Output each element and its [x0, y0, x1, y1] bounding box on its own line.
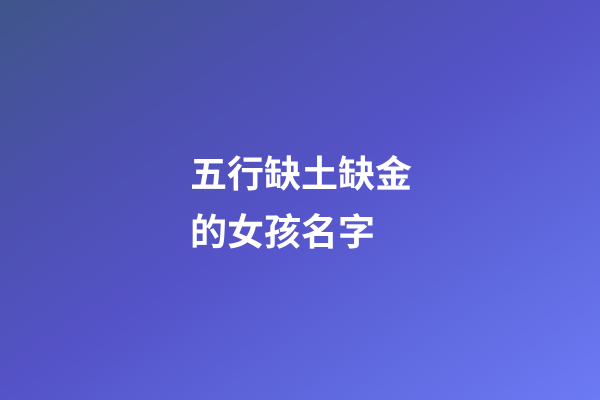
title: 的女孩名字 — [190, 212, 375, 253]
title — [190, 154, 412, 253]
title: 五行缺土缺金 — [190, 154, 412, 195]
